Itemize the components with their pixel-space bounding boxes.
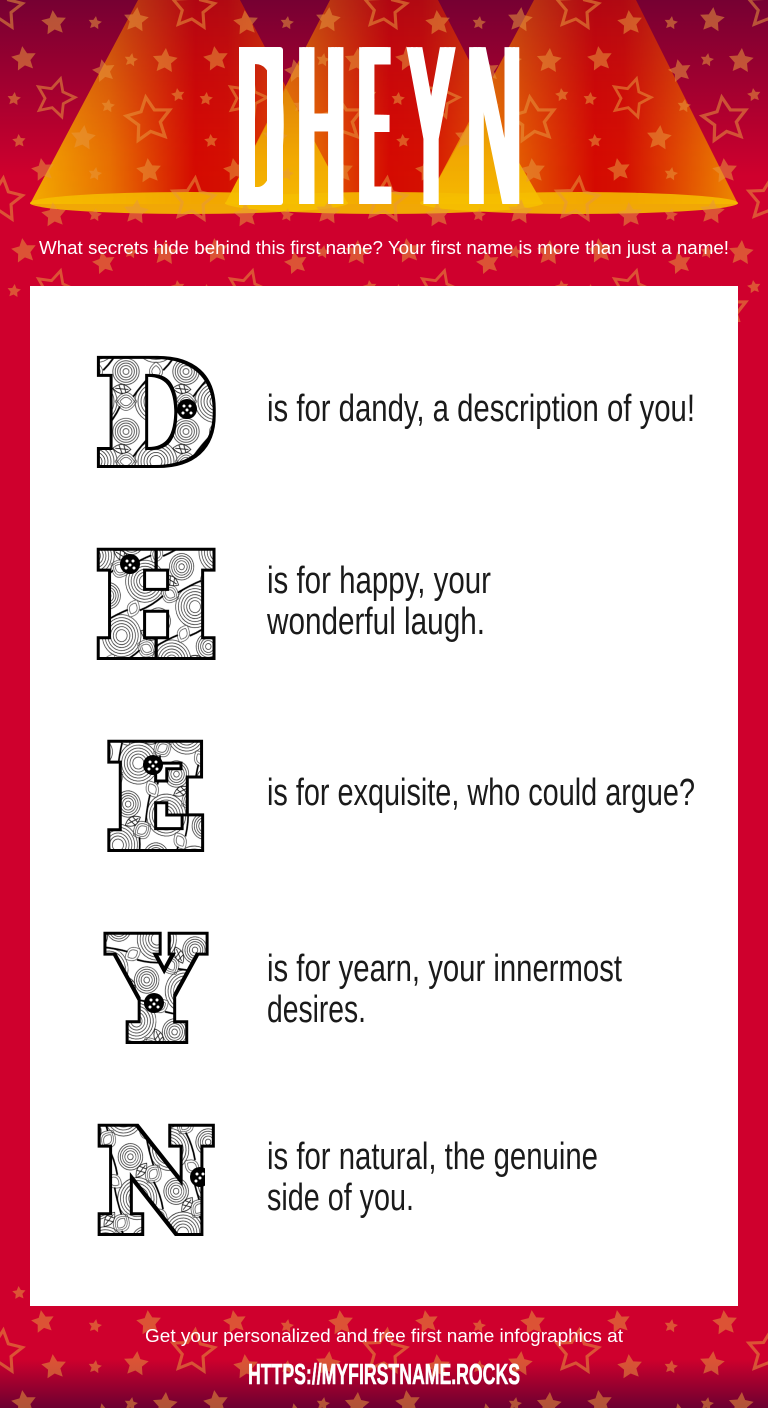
letter N row (98, 1124, 597, 1236)
title: Y (405, 0, 448, 253)
text: N lines: is for natural, the genuine (267, 1136, 598, 1178)
spotlights (30, 0, 738, 214)
title: N (463, 0, 517, 253)
icon: ornamental letter D: D (97, 334, 215, 494)
text: Y lines: is for yearn, your innermost (267, 948, 622, 990)
icon: ornamental letter N: N (100, 1105, 212, 1260)
text: Y lines: desires. (267, 989, 366, 1031)
title: H (294, 0, 339, 253)
text: N lines: side of you. (267, 1177, 414, 1219)
text: H lines (266, 560, 491, 643)
icon: ornamental letter Y: Y (110, 913, 202, 1068)
title (233, 0, 520, 253)
text: Y lines (267, 948, 622, 1031)
footer line: Get your personalized and free first name infographics at (145, 1326, 623, 1346)
footer url: HTTPS://MYFIRSTNAME.ROCKS (248, 1359, 520, 1391)
letter Y row (110, 913, 622, 1068)
text: H lines: is for happy, your (267, 560, 491, 602)
icon: ornamental letter E: E (109, 721, 203, 876)
letter E row (109, 721, 695, 876)
text: H lines: wonderful laugh. (266, 601, 485, 643)
panel: white content card (30, 286, 738, 1306)
letter H row (99, 528, 491, 683)
text: N lines (267, 1136, 598, 1219)
subtitle: What secrets hide behind this first name? Your first name is more than just a name! (39, 238, 729, 258)
foreground: panel, letters and text (30, 240, 738, 1385)
icon: ornamental letter H: H (99, 528, 213, 683)
title: D (233, 0, 287, 253)
letter D row (97, 334, 695, 494)
title: E (356, 0, 381, 253)
